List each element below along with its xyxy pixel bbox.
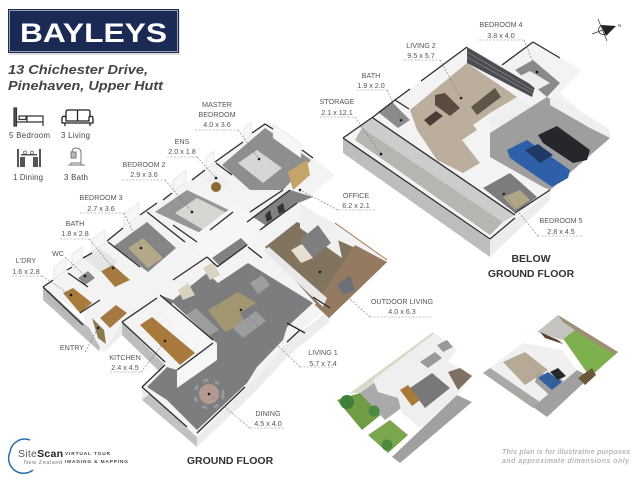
floor: bedroom 2 <box>155 190 233 236</box>
label: office: 6.2 x 2.1 <box>342 201 370 210</box>
heading: ground floor: GROUND FLOOR <box>187 455 274 467</box>
label: bath below: BATH <box>362 71 380 80</box>
living 2 floor <box>410 63 517 173</box>
back paving <box>558 315 618 355</box>
bath floor <box>378 102 410 128</box>
garage floor <box>490 97 610 190</box>
garden bed <box>578 368 596 385</box>
heading: below ground floor <box>488 253 575 280</box>
disclaimer: This plan is for illustrative purposes <box>502 449 630 456</box>
label: 3 Living: 3 Living <box>61 131 90 140</box>
label: dining: DINING <box>255 409 281 418</box>
bed: bedroom 3 <box>128 238 163 268</box>
room marker dots <box>380 71 538 195</box>
icon: bath tap <box>68 148 85 165</box>
label: bath below: 1.9 x 2.0 <box>357 81 385 90</box>
bedroom 5 floor <box>483 173 537 213</box>
lawn corner <box>368 420 408 453</box>
label: bedroom 3: BEDROOM 3 <box>79 193 123 202</box>
address heading: Pinehaven, Upper Hutt <box>8 78 164 93</box>
left-facing wall faces <box>43 287 103 351</box>
label: ens: 2.0 x 1.8 <box>168 147 196 156</box>
label: bedroom 2 <box>122 160 166 180</box>
heading: below ground floor: BELOW <box>511 253 551 265</box>
house <box>483 343 577 407</box>
bedroom 4 floor <box>515 60 560 97</box>
dark walls <box>343 42 560 239</box>
tree <box>382 440 392 450</box>
tree <box>340 395 354 409</box>
label: outdoor living: 4.0 x 6.3 <box>388 307 416 316</box>
floor: bath <box>100 265 130 287</box>
label: laundry <box>12 256 42 276</box>
label: 1 Dining: 1 Dining <box>13 173 43 182</box>
label: bedroom 5: 2.8 x 4.5 <box>547 227 575 236</box>
label: master bedroom <box>195 100 238 130</box>
label: bedroom 2: BEDROOM 2 <box>122 160 166 169</box>
label: living 2 <box>404 41 440 60</box>
dark walls <box>43 124 330 433</box>
label: bath below <box>357 71 387 90</box>
panel: below ground site view <box>483 315 618 417</box>
label: bedroom 5 <box>538 216 583 236</box>
label: living 1: 5.7 x 7.4 <box>309 359 337 368</box>
floor: kitchen <box>140 317 195 365</box>
white corridor walls <box>195 205 265 262</box>
building base <box>43 124 387 437</box>
label: ens: ENS <box>175 137 190 146</box>
sofas: living <box>186 308 219 336</box>
panel: ground floor site view <box>337 332 473 463</box>
right-facing wall faces <box>197 310 329 447</box>
panel: below ground floor plan <box>343 42 610 257</box>
car: black <box>538 126 590 163</box>
logo: SiteScan <box>9 439 128 473</box>
car: blue <box>538 372 562 390</box>
deck rail <box>335 223 387 260</box>
logo: SiteScan: SiteScan <box>18 448 63 460</box>
storage strip <box>483 368 540 408</box>
wardrobe <box>288 160 310 190</box>
label: office <box>338 191 375 210</box>
address heading <box>8 62 164 93</box>
icon: bed <box>14 108 43 126</box>
bookshelves <box>467 47 535 97</box>
garage doors <box>550 96 610 138</box>
room summary icons <box>9 108 93 182</box>
label: bedroom 3 <box>79 193 124 213</box>
floor: living 1 <box>147 263 313 430</box>
label: storage: STORAGE <box>319 97 355 106</box>
label: kitchen: KITCHEN <box>109 353 141 362</box>
floor: laundry <box>63 288 92 313</box>
label: bath ground: 1.8 x 2.8 <box>61 229 89 238</box>
house <box>373 333 473 428</box>
room marker dots <box>70 158 321 395</box>
dining table <box>424 111 443 126</box>
label: master bedroom: BEDROOM <box>198 110 236 119</box>
label: storage: 2.1 x 12.1 <box>321 108 353 117</box>
kitchen: white counters <box>160 303 213 353</box>
tree <box>368 406 380 416</box>
dining table <box>195 380 223 408</box>
label: wc: WC <box>52 249 64 258</box>
icon: dining set <box>17 149 41 167</box>
rug <box>208 292 256 332</box>
outer wall face <box>343 138 490 257</box>
logo: SiteScan: VIRTUAL TOUR <box>65 451 111 457</box>
logo: SiteScan: IMAGING & MAPPING <box>65 459 128 465</box>
floor: WC <box>78 271 95 285</box>
logo: Bayleys: BAYLEYS <box>20 18 167 48</box>
label: dining: 4.5 x 4.0 <box>254 419 282 428</box>
label: entry: ENTRY <box>60 343 84 352</box>
floor: hall <box>248 190 313 230</box>
bed: bedroom 2 <box>175 198 227 232</box>
floor: master bedroom <box>222 128 311 190</box>
building base <box>343 42 610 240</box>
car: black <box>550 368 566 380</box>
label: office: OFFICE <box>343 191 369 200</box>
heading: below ground floor: GROUND FLOOR <box>488 268 575 280</box>
label: bath ground <box>60 219 89 239</box>
label: bedroom 4 <box>479 20 524 40</box>
floor: ensuite <box>205 172 230 192</box>
label: 5 Bedroom: 5 Bedroom <box>9 131 50 140</box>
floor: bedroom 3 <box>114 222 176 272</box>
label: storage <box>319 97 355 117</box>
disclaimer <box>502 449 630 465</box>
sofa: outdoor living room <box>300 225 331 258</box>
label: bath ground: BATH <box>66 219 84 228</box>
lawn front <box>337 393 383 430</box>
white partition <box>490 97 530 130</box>
label: kitchen: 2.4 x 4.5 <box>111 363 139 372</box>
panel: ground floor plan <box>43 122 387 447</box>
logo: Bayleys <box>8 9 180 55</box>
storage floor <box>355 128 503 235</box>
floor: small hall <box>212 238 248 265</box>
icon: sofa <box>62 110 93 126</box>
sofas <box>435 93 460 116</box>
label: bedroom 4: BEDROOM 4 <box>479 20 523 29</box>
label: bedroom 4: 3.8 x 4.0 <box>487 31 515 40</box>
driveway <box>392 395 472 463</box>
label: living 1 <box>300 348 338 368</box>
label: laundry: 1.6 x 2.8 <box>12 267 40 276</box>
label: bedroom 2: 2.9 x 3.6 <box>130 170 158 179</box>
label: living 2: 9.5 x 5.7 <box>407 51 435 60</box>
label: 3 Bath: 3 Bath <box>64 173 88 182</box>
label: dining <box>250 409 285 428</box>
disclaimer: and approximate dimensions only <box>502 458 630 465</box>
compass <box>592 19 621 41</box>
window panels on back walls <box>54 122 301 279</box>
label: ens <box>167 137 197 157</box>
label: bedroom 3: 2.7 x 3.6 <box>87 204 115 213</box>
floor: living 3 / outdoor timber <box>265 222 387 318</box>
label: outdoor living: OUTDOOR LIVING <box>371 297 434 306</box>
label: master bedroom: 4.0 x 3.6 <box>203 120 231 129</box>
floor: entry <box>100 305 127 328</box>
leader lines <box>42 40 538 428</box>
label: kitchen <box>109 353 141 372</box>
address heading: 13 Chichester Drive, <box>8 62 148 77</box>
label: bedroom 5: BEDROOM 5 <box>539 216 583 225</box>
storage wall <box>360 118 515 222</box>
label: living 1: LIVING 1 <box>308 348 338 357</box>
label: outdoor living <box>370 297 434 317</box>
driveway <box>533 370 590 417</box>
path strip <box>350 332 436 393</box>
bed: master <box>238 150 282 183</box>
car: blue <box>507 140 570 187</box>
logo: SiteScan: New Zealand <box>24 460 62 466</box>
compass: N <box>618 23 621 28</box>
label: master bedroom: MASTER <box>202 100 232 109</box>
label: living 2: LIVING 2 <box>406 41 436 50</box>
white sliding doors <box>263 247 327 307</box>
lawn <box>562 322 618 377</box>
label: laundry: L'DRY <box>16 256 36 265</box>
